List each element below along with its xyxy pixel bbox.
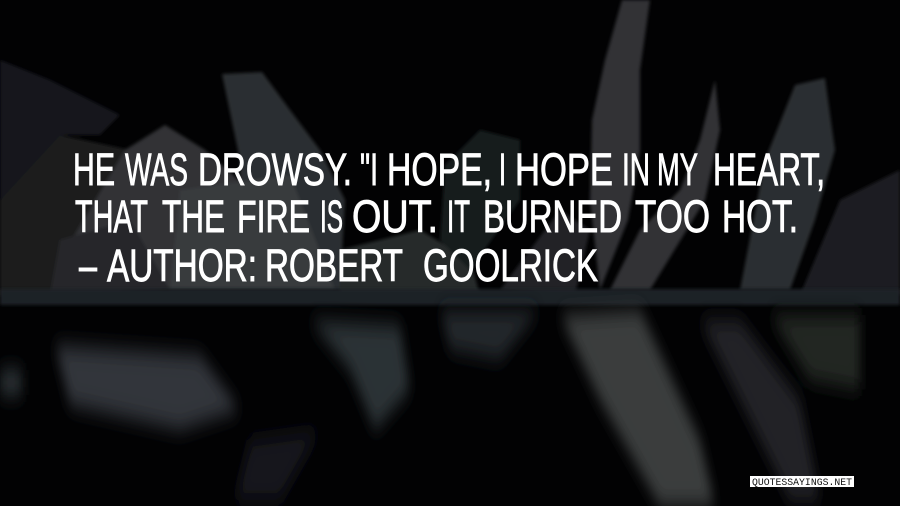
background: dark rocks bbox=[0, 0, 900, 300]
line 1: I bbox=[499, 144, 506, 195]
line 3: author: GOOLRICK bbox=[423, 240, 598, 291]
line 1: MY bbox=[657, 144, 698, 195]
line 2: THAT bbox=[75, 191, 148, 242]
line 1: WAS bbox=[125, 144, 188, 195]
line 1 bbox=[73, 144, 825, 195]
line 2: BURNED bbox=[483, 191, 622, 242]
line 3: author: AUTHOR: bbox=[107, 240, 257, 291]
line 3: author bbox=[79, 240, 598, 291]
line 2: IT bbox=[447, 191, 470, 242]
line 3: author: – bbox=[79, 240, 97, 291]
line 2: OUT. bbox=[352, 191, 438, 242]
line 1: HE bbox=[73, 144, 115, 195]
quote text bbox=[73, 144, 825, 291]
line 1: "I bbox=[360, 144, 378, 195]
line 3: author: ROBERT bbox=[265, 240, 403, 291]
line 1: HOPE, bbox=[387, 144, 492, 195]
line 2: TOO bbox=[635, 191, 710, 242]
watermark badge: QUOTESSAYINGS.NET bbox=[752, 478, 852, 489]
line 1: HEART, bbox=[713, 144, 825, 195]
line 1: DROWSY. bbox=[198, 144, 352, 195]
background: water reflection bbox=[0, 310, 860, 506]
line 2: THE bbox=[162, 191, 225, 242]
line 2: FIRE bbox=[237, 191, 310, 242]
background: horizon band bbox=[0, 289, 900, 305]
line 2: IS bbox=[320, 191, 343, 242]
line 1: HOPE bbox=[515, 144, 613, 195]
line 1: IN bbox=[622, 144, 650, 195]
line 2 bbox=[75, 191, 798, 242]
line 2: HOT. bbox=[722, 191, 798, 242]
